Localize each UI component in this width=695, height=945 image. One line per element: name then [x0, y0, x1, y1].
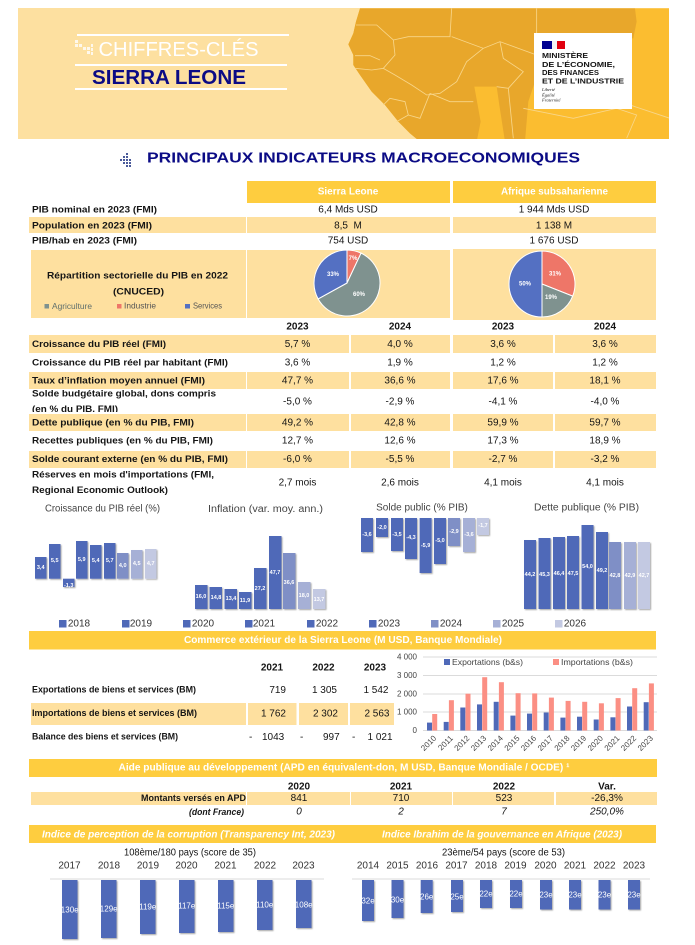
chart: indice de perception de la corruption — [50, 848, 324, 939]
year labels: 2016 — [416, 860, 439, 872]
chart: solde public: -3,6 — [464, 532, 474, 538]
row: sector breakdown: 7% — [349, 256, 358, 262]
year headers: Var. — [598, 782, 616, 792]
legend: years 2018-2026: 2024 — [440, 618, 463, 630]
year headers: 2021 — [390, 782, 413, 792]
row: sector breakdown: 50% — [519, 282, 532, 288]
row: balance: - — [249, 732, 252, 743]
chart: inflation: 14,8 — [211, 595, 221, 601]
chart: dette publique: 42,8 — [610, 573, 620, 579]
row: sector breakdown: 19% — [545, 295, 558, 301]
legend: years 2018-2026: 2022 — [316, 618, 339, 630]
x axis labels: 2013 — [469, 733, 489, 753]
year labels: 2017 — [445, 860, 468, 872]
row: montants versés: 841 — [291, 793, 308, 804]
chart: dette publique: 44,2 — [525, 572, 535, 578]
chart: indice Ibrahim: 23e — [598, 890, 612, 900]
x axis labels: 2014 — [486, 733, 505, 753]
row: importations — [31, 703, 394, 725]
row: croissance par habitant: 1,2 % — [592, 358, 618, 368]
year labels: 2020 — [175, 860, 198, 872]
year headers: 2024 — [389, 322, 412, 332]
row: solde budgétaire — [32, 390, 620, 412]
row: réserves: Réserves en mois d'importations (FMI, — [32, 470, 214, 480]
x axis labels: 2010 — [419, 733, 439, 753]
chart: indice de perception de la corruption: 117e — [178, 902, 196, 910]
chart: inflation: 47,7 — [270, 570, 280, 576]
row: balance: 1043 — [262, 732, 285, 743]
chart: solde public — [361, 502, 489, 573]
row: PIB nominal — [32, 204, 589, 216]
heading: commerce extérieur: Commerce extérieur de la Sierra Leone (M USD, Banque Mondiale) — [184, 635, 502, 646]
row: solde courant: -3,2 % — [591, 454, 620, 465]
year labels: 2023 — [623, 860, 646, 872]
row: croissance par habitant: 1,9 % — [387, 358, 413, 368]
column header: Sierra Leone: Sierra Leone — [318, 186, 379, 198]
row: exportations — [32, 684, 389, 696]
ministry logo: Liberté — [541, 87, 556, 92]
chart legend — [444, 657, 633, 667]
chart: indice Ibrahim: 23e — [539, 890, 553, 900]
legend: years 2018-2026: 2018 — [68, 618, 91, 630]
chart: indice Ibrahim: 22e — [509, 890, 523, 898]
chart: croissance du PIB réel: 5,5 — [51, 558, 59, 564]
banner title: Sierra Leone: SIERRA LEONE — [92, 67, 246, 89]
row: PIB nominal: 6,4 Mds USD — [318, 204, 378, 216]
row: balance: 997 — [323, 732, 340, 743]
pie legend — [44, 300, 222, 311]
column header: Afrique subsaharienne — [453, 181, 656, 203]
ministry logo: ET DE L’INDUSTRIE — [542, 76, 624, 86]
y axis labels: 4 000 — [397, 652, 418, 662]
ministry logo — [534, 33, 632, 109]
pie legend: Agriculture — [52, 301, 92, 311]
y axis labels: 2 000 — [397, 690, 418, 698]
chart: dette publique: 42,7 — [639, 573, 649, 579]
row: solde courant: -5,5 % — [386, 454, 415, 465]
row: importations: Importations de biens et services (BM) — [32, 708, 197, 719]
row: solde budgétaire: -4,1 % — [489, 396, 518, 408]
header banner — [18, 8, 670, 142]
x axis labels: 2012 — [453, 733, 472, 753]
chart: inflation: Inflation (var. moy. ann.) — [208, 504, 323, 515]
year headers: 2021 — [261, 662, 284, 674]
y axis labels: 0 — [413, 726, 418, 735]
row: recettes publiques: 18,9 % — [589, 436, 621, 446]
chart: croissance du PIB réel: -1,3 — [64, 583, 73, 589]
row: recettes publiques: Recettes publiques (en % du PIB, FMI) — [32, 436, 213, 446]
chart: indice de perception de la corruption: 129e — [100, 904, 118, 914]
year headers: 2020 — [288, 782, 311, 792]
year labels: 2018 — [475, 860, 498, 872]
row: exportations: 1 305 — [312, 685, 337, 696]
chart: solde public: -1,7 — [478, 523, 488, 529]
chart: inflation: 13,4 — [226, 596, 237, 602]
pie legend: Services — [193, 300, 222, 310]
year labels — [357, 860, 646, 872]
year labels: 2014 — [357, 860, 380, 872]
pie chart: Sierra Leone — [314, 250, 380, 316]
chart: croissance du PIB réel: 4,0 — [119, 563, 127, 569]
row: dette publique: 59,7 % — [589, 418, 621, 428]
year headers: 2022 — [493, 782, 516, 792]
chart legend: Importations (b&s) — [561, 657, 633, 667]
ministry logo: DE L’ÉCONOMIE, — [542, 60, 615, 69]
row: inflation: 17,6 % — [487, 376, 519, 386]
chart: indice de perception de la corruption: 110e — [256, 900, 274, 910]
chart: solde public: -4,3 — [406, 535, 416, 541]
row: solde budgétaire: Solde budgétaire global, dons compris — [32, 388, 216, 400]
row: population: 1 138 M — [536, 220, 572, 232]
chart: solde public: -5,9 — [421, 543, 430, 549]
row: croissance — [29, 335, 656, 353]
chart: indice de perception de la corruption: 119e — [139, 902, 157, 912]
legend: years 2018-2026: 2019 — [130, 618, 153, 630]
chart: dette publique: Dette publique (% PIB) — [534, 502, 639, 514]
year labels: 2021 — [564, 860, 587, 872]
chart: indice Ibrahim: 23e — [627, 890, 641, 900]
row: inflation: 18,1 % — [589, 376, 621, 386]
x axis labels: 2018 — [553, 733, 572, 753]
year headers — [261, 662, 387, 674]
row: croissance par habitant — [32, 358, 618, 368]
chart: croissance du PIB réel: 5,4 — [92, 558, 100, 564]
row: dette publique: Dette publique (en % du PIB, FMI) — [32, 418, 194, 428]
chart: dette publique: 42,9 — [625, 573, 635, 579]
chart: indice Ibrahim: 25e — [450, 892, 464, 902]
row: dette publique — [29, 414, 656, 431]
chart: dette publique: 47,5 — [568, 571, 578, 577]
row: solde budgétaire: (en % du PIB, FMI) — [32, 404, 118, 415]
chart: dette publique: 46,4 — [554, 571, 565, 577]
row: croissance: 4,0 % — [387, 339, 413, 350]
chart: indice de perception de la corruption: 115e — [217, 902, 235, 910]
row: population — [29, 217, 656, 233]
row: inflation: Taux d’inflation moyen annuel (FMI) — [32, 376, 205, 386]
year labels: 2023 — [292, 860, 315, 872]
row: exportations: 1 542 — [363, 685, 389, 696]
row: croissance par habitant: 3,6 % — [285, 358, 310, 368]
row: sector breakdown: 31% — [549, 272, 562, 278]
export bars — [427, 702, 649, 730]
row: réserves — [32, 470, 624, 496]
table: APD — [31, 782, 657, 818]
row: réserves: 4,1 mois — [484, 478, 522, 488]
chart: indice Ibrahim: 32e — [361, 896, 375, 906]
legend: years 2018-2026: 2021 — [253, 618, 276, 630]
pie chart: Afrique subsaharienne — [509, 251, 575, 317]
row: dont France: 250,0% — [589, 806, 624, 818]
chart: indice Ibrahim: 23e — [568, 890, 582, 900]
row: PIB par habitant: PIB/hab en 2023 (FMI) — [32, 236, 137, 246]
heading: aide publique au développement — [29, 759, 657, 777]
chart: inflation: 13,7 — [314, 597, 324, 603]
x axis labels: 2021 — [603, 733, 622, 753]
chart: indice Ibrahim: 26e — [420, 892, 434, 902]
row: montants versés — [31, 792, 657, 805]
row: balance: 1 021 — [368, 732, 393, 743]
import bars — [432, 677, 654, 730]
row: population: 8,5 M — [334, 220, 362, 232]
table: annual indicators — [29, 322, 656, 496]
chart: dette publique: 49,2 — [597, 568, 607, 574]
row: solde budgétaire: -4,0 % — [591, 396, 620, 408]
chart: indice de perception de la corruption: 130e — [61, 906, 79, 914]
row: recettes publiques: 12,7 % — [282, 436, 313, 446]
x axis labels: 2017 — [536, 733, 555, 753]
row: inflation: 36,6 % — [384, 376, 416, 386]
heading bar: indices de gouvernance — [29, 825, 656, 843]
year labels: 2020 — [534, 860, 557, 872]
legend: years 2018-2026: 2025 — [502, 618, 525, 630]
chart: solde public: -2,0 — [377, 525, 387, 531]
year headers — [288, 782, 616, 792]
row: croissance: 3,6 % — [592, 339, 618, 350]
year labels: 2019 — [504, 860, 527, 872]
row: exportations: Exportations de biens et services (BM) — [32, 684, 196, 696]
chart: solde public: -2,9 — [449, 529, 459, 535]
title lines — [75, 35, 289, 89]
row: PIB par habitant: 754 USD — [328, 236, 368, 246]
heading: commerce extérieur — [29, 631, 656, 650]
chart: inflation — [195, 504, 326, 609]
x axis labels: 2020 — [586, 733, 605, 753]
row: solde courant: -6,0 % — [283, 454, 312, 465]
heading: aide publique au développement: Aide publique au développement (APD en équivalent-don, M USD, Banque Mondiale / OCDE) ¹ — [118, 762, 570, 774]
row: réserves: Regional Economic Outlook) — [32, 485, 168, 496]
year labels: 2015 — [386, 860, 409, 872]
chart: indice de perception de la corruption: 108e — [295, 900, 313, 910]
chart: solde public: -3,5 — [392, 532, 402, 538]
row: dont France: 0 — [296, 806, 302, 818]
row: solde courant: -2,7 % — [489, 454, 518, 465]
row: dont France: 7 — [501, 806, 507, 818]
table: commerce — [31, 662, 394, 743]
row: recettes publiques: 17,3 % — [487, 436, 519, 446]
chart legend: Exportations (b&s) — [452, 657, 523, 667]
chart: croissance du PIB réel — [35, 504, 160, 589]
chart: dette publique: 54,0 — [582, 564, 593, 570]
x axis labels: 2016 — [519, 733, 539, 753]
ministry logo: Fraternité — [541, 98, 561, 102]
chart: croissance du PIB réel: 4,7 — [147, 561, 155, 567]
row: exportations: 719 — [269, 685, 286, 696]
map of West Africa — [348, 8, 670, 142]
row: dont France — [189, 806, 624, 818]
row: importations: 1 762 — [261, 708, 286, 720]
year labels: 2019 — [137, 860, 160, 872]
row: dont France: 2 — [397, 806, 404, 818]
row: montants versés: 523 — [496, 793, 513, 804]
year headers — [286, 322, 617, 332]
heading bar: indices de gouvernance: Indice de perception de la corruption (Transparency Int, 2023) — [42, 830, 336, 840]
year labels: 2022 — [593, 860, 616, 872]
section heading: PRINCIPAUX INDICATEURS MACROECONOMIQUES — [147, 150, 580, 166]
ministry logo: Égalité — [541, 92, 556, 98]
chart: inflation: 18,0 — [299, 593, 309, 599]
row: sector breakdown: (CNUCED) — [113, 286, 164, 298]
chart: solde public: Solde public (% PIB) — [376, 502, 468, 514]
row: recettes publiques — [32, 436, 621, 446]
row: solde courant — [29, 451, 656, 468]
chart: solde public: -3,6 — [362, 532, 372, 538]
row: réserves: 2,6 mois — [381, 478, 419, 488]
x axis labels: 2019 — [569, 733, 589, 753]
x axis labels: 2022 — [619, 733, 639, 753]
chart: dette publique: 45,3 — [539, 572, 550, 578]
x axis labels: 2023 — [636, 733, 655, 753]
column header: Sierra Leone — [247, 181, 450, 203]
row: montants versés: Montants versés en APD — [141, 793, 246, 804]
row: balance — [32, 732, 393, 743]
chart: solde public: -5,0 — [435, 538, 445, 544]
year headers: 2022 — [312, 662, 335, 674]
year labels: 2018 — [98, 860, 121, 872]
year labels — [58, 860, 315, 872]
row: dont France: (dont France) — [189, 807, 244, 817]
legend: years 2018-2026 — [59, 618, 587, 630]
y axis labels: 1 000 — [397, 708, 418, 716]
chart: dette publique — [524, 502, 650, 609]
row: sector breakdown: 60% — [353, 292, 366, 298]
chart: indice Ibrahim: 30e — [391, 896, 405, 904]
x axis labels: 2015 — [503, 733, 522, 753]
icon: dotted pattern heading — [120, 153, 131, 167]
row: croissance par habitant: 1,2 % — [490, 358, 516, 368]
chart: indice Ibrahim: 22e — [479, 890, 493, 898]
year headers: 2023 — [286, 322, 309, 332]
year headers: 2023 — [364, 662, 387, 674]
row: croissance: Croissance du PIB réel (FMI) — [32, 339, 166, 350]
chart: croissance du PIB réel: 5,7 — [106, 558, 114, 564]
pie legend: Industrie — [124, 300, 156, 310]
x axis labels — [419, 733, 655, 753]
x axis labels: 2011 — [436, 733, 455, 752]
legend: years 2018-2026: 2020 — [192, 618, 215, 630]
row: sector breakdown: 33% — [327, 272, 340, 278]
chart: indice Ibrahim — [352, 848, 650, 921]
legend: years 2018-2026: 2023 — [378, 618, 401, 630]
row: inflation — [29, 372, 656, 389]
year labels: 2022 — [254, 860, 277, 872]
row: croissance par habitant: Croissance du PIB réel par habitant (FMI) — [32, 358, 228, 368]
chart: croissance du PIB réel: 4,5 — [133, 561, 141, 567]
row: montants versés: -26,3% — [591, 793, 623, 804]
ministry logo: MINISTÈRE — [542, 51, 588, 60]
year labels: 2017 — [58, 860, 81, 872]
row: balance: Balance des biens et services (BM) — [32, 732, 178, 742]
chart: exportations et importations — [397, 652, 657, 753]
row: recettes publiques: 12,6 % — [384, 436, 416, 446]
chart: inflation: 36,6 — [284, 580, 294, 586]
chart: indice Ibrahim: 23ème/54 pays (score de 53) — [442, 848, 565, 858]
icon: dotted pattern — [75, 40, 93, 55]
year headers: 2024 — [594, 322, 617, 332]
row: montants versés: 710 — [393, 793, 410, 804]
row: PIB par habitant: 1 676 USD — [530, 236, 578, 246]
chart: inflation: 27,2 — [255, 586, 265, 592]
row: balance: - — [300, 732, 303, 743]
y axis labels: 3 000 — [397, 671, 418, 680]
row: inflation: 47,7 % — [282, 376, 313, 386]
row: PIB nominal: PIB nominal en 2023 (FMI) — [32, 204, 157, 216]
column header: Afrique subsaharienne: Afrique subsaharienne — [501, 186, 608, 198]
y axis labels — [397, 652, 418, 735]
year headers: 2023 — [492, 322, 515, 332]
row: population: Population en 2023 (FMI) — [32, 220, 152, 232]
row: dette publique: 59,9 % — [487, 418, 519, 428]
row: sector breakdown — [31, 249, 656, 320]
row: réserves: 4,1 mois — [586, 478, 624, 488]
row: solde budgétaire: -2,9 % — [386, 396, 415, 408]
row: réserves: 2,7 mois — [279, 478, 316, 488]
row: solde courant: Solde courant externe (en % du PIB, FMI) — [32, 454, 228, 465]
chart: inflation: 11,9 — [240, 598, 250, 604]
banner title: chiffres-clés: CHIFFRES-CLÉS — [98, 38, 258, 61]
heading bar: indices de gouvernance: Indice Ibrahim de la gouvernance en Afrique (2023) — [382, 830, 623, 840]
legend: years 2018-2026: 2026 — [564, 618, 587, 630]
chart: croissance du PIB réel: Croissance du PIB réel (%) — [45, 504, 160, 514]
year labels: 2021 — [214, 860, 237, 872]
row: importations: 2 302 — [313, 708, 338, 720]
row: dette publique: 49,2 % — [282, 418, 313, 428]
table: general indicators — [29, 181, 656, 320]
chart: indice de perception de la corruption: 108ème/180 pays (score de 35) — [124, 848, 256, 858]
row: PIB par habitant — [32, 236, 578, 246]
ministry logo: DES FINANCES — [542, 68, 599, 77]
chart: croissance du PIB réel: 3,4 — [37, 565, 45, 571]
row: importations: 2 563 — [364, 708, 390, 720]
row: dette publique: 42,8 % — [384, 418, 416, 428]
chart: inflation: 16,0 — [196, 594, 206, 600]
row: croissance: 3,6 % — [490, 339, 516, 350]
row: PIB nominal: 1 944 Mds USD — [519, 204, 589, 216]
row: solde budgétaire: -5,0 % — [283, 396, 312, 408]
chart: croissance du PIB réel: 5,9 — [78, 557, 86, 563]
row: croissance: 5,7 % — [285, 339, 310, 350]
row: balance: - — [352, 732, 355, 743]
row: sector breakdown: Répartition sectorielle du PIB en 2022 — [47, 270, 228, 282]
